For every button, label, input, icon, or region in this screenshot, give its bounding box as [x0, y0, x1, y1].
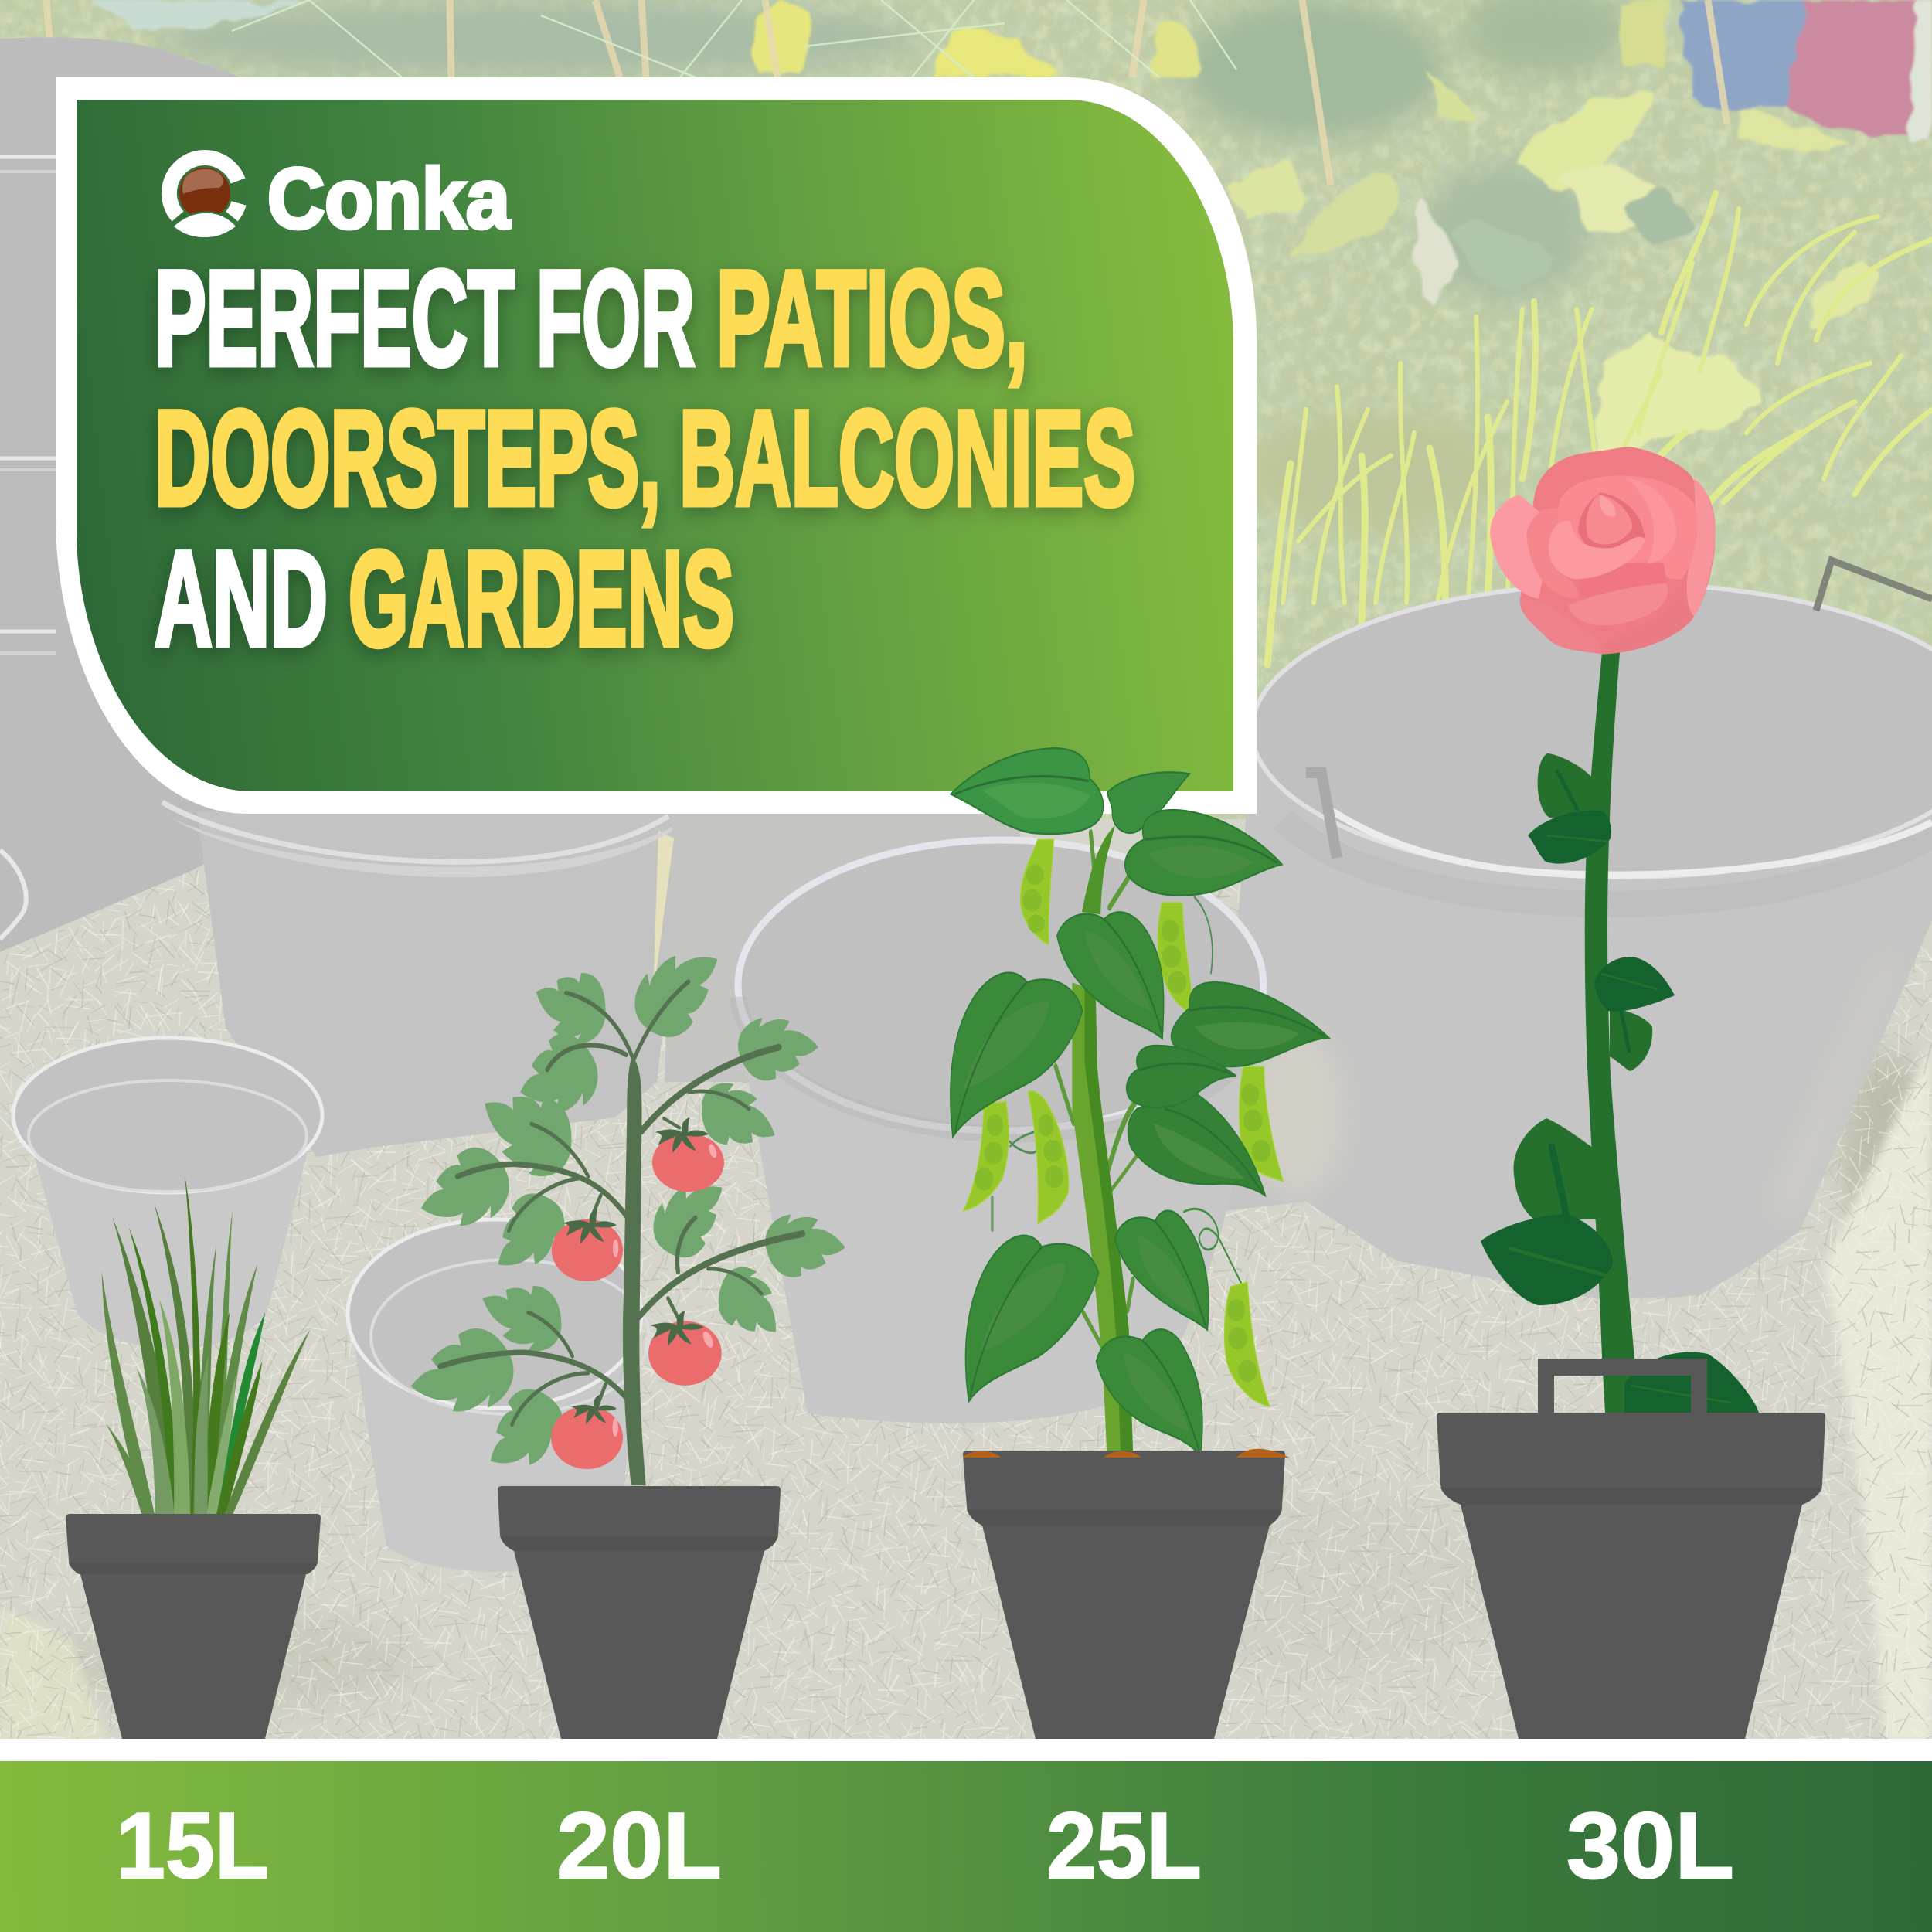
pea pods — [963, 839, 1284, 1406]
title: DOORSTEPS, — [155, 383, 661, 534]
pea leaves — [951, 748, 1328, 1455]
small pot, left — [13, 1038, 322, 1349]
pea leaf highlights — [963, 783, 1300, 1432]
centre tub — [734, 840, 1269, 1423]
back tub — [162, 802, 1020, 1157]
pot 30L — [1437, 1359, 1825, 1739]
white divider strip — [0, 1739, 1932, 1761]
rose front leaves — [1481, 811, 1759, 1413]
15L plant: grass — [102, 1175, 311, 1514]
20L plant: tomato — [403, 927, 845, 1492]
small pot, middle — [348, 1219, 649, 1572]
tomatoes — [551, 1117, 724, 1469]
panel: headline card — [56, 77, 1257, 814]
tomato stems — [440, 981, 803, 1425]
label: 15L: 15L — [116, 1793, 269, 1898]
rose stem — [1585, 652, 1634, 1413]
logo: Conka — [169, 151, 511, 247]
pot 15L — [66, 1514, 321, 1739]
title: PATIOS, — [716, 243, 1028, 394]
pea side stems and tendrils — [992, 832, 1242, 1345]
label: 25L: 25L — [1046, 1793, 1202, 1898]
logo wordmark: Conka — [267, 151, 511, 247]
card green fill — [77, 100, 1233, 791]
icon: coconut ring — [169, 158, 239, 237]
title: AND — [155, 524, 328, 675]
far-left stacked tubs — [0, 37, 270, 952]
title: PERFECT — [155, 243, 515, 394]
pea leaf veins — [955, 776, 1325, 1451]
pot 20L — [498, 1486, 781, 1739]
title — [155, 243, 1135, 675]
pot handle — [1538, 1359, 1707, 1416]
title: BALCONIES — [679, 383, 1135, 534]
label: 20L: 20L — [556, 1793, 722, 1898]
rose bloom — [1490, 447, 1716, 655]
garden foliage — [0, 0, 1932, 819]
25L plant: pea — [951, 748, 1328, 1455]
card white border — [56, 77, 1257, 814]
label: 30L: 30L — [1566, 1793, 1734, 1898]
pea main stem — [1072, 825, 1133, 1451]
pot 25L — [963, 1449, 1289, 1739]
volume bar — [0, 1761, 1932, 1932]
soil mounds — [963, 1449, 1289, 1458]
title: GARDENS — [349, 524, 734, 675]
tomato leaves — [403, 927, 845, 1492]
big tub on the right — [1216, 560, 1932, 1300]
rose leaf veins — [1509, 835, 1731, 1403]
title: FOR — [536, 243, 695, 394]
rose back leaves — [1513, 753, 1652, 1219]
tomato main stem — [623, 1055, 646, 1485]
30L plant: rose — [1481, 447, 1759, 1413]
